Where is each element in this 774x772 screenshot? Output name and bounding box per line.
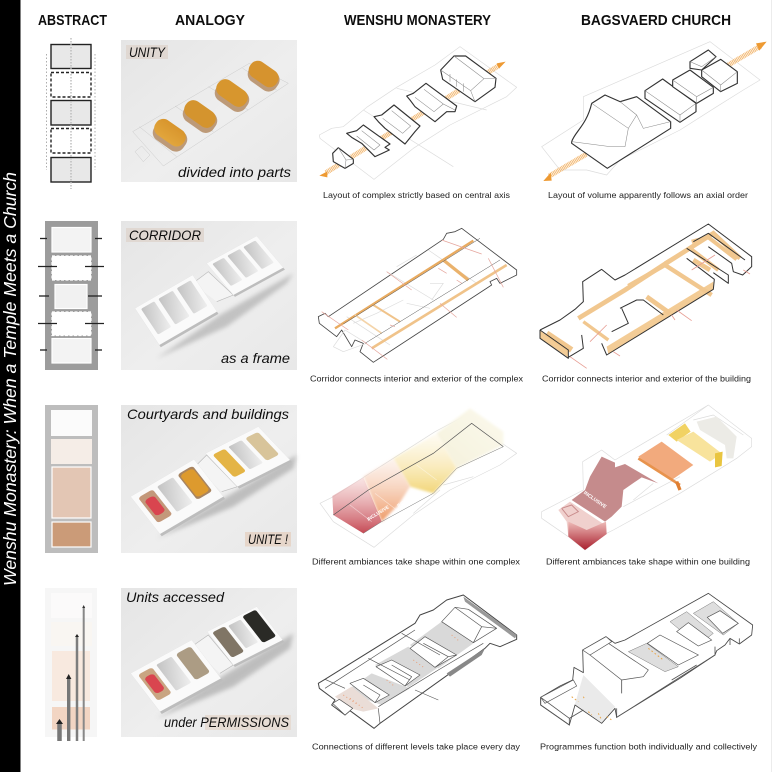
yellow zone	[668, 423, 723, 467]
red zone	[332, 477, 382, 533]
volume 5	[690, 50, 716, 70]
label: corridor: CORRIDOR	[129, 227, 201, 243]
sidebar: vertical title: Wenshu Monastery: When a Temple Meets a Church	[0, 172, 20, 586]
ghost roofs	[333, 250, 477, 352]
zone labels	[366, 491, 420, 522]
abstract diagram: permissions	[45, 588, 97, 741]
photo: courtyards	[121, 405, 297, 553]
heading: analogy: ANALOGY	[175, 12, 245, 29]
outer walls	[540, 224, 752, 358]
right edge line	[771, 0, 772, 772]
caption: Corridor connects interior and exterior of the building	[542, 374, 751, 384]
photo: permissions	[121, 588, 297, 737]
caption: Connections of different levels take place every day	[312, 742, 521, 752]
bagsvaerd diagram: ambiances	[542, 405, 752, 550]
axis line and roofs	[333, 423, 503, 533]
label: as a frame: as a frame	[221, 350, 290, 366]
caption: Layout of complex strictly based on central axis	[323, 190, 510, 200]
zone labels: INCLUSIVE	[366, 504, 390, 522]
plan outline under loaves	[133, 63, 288, 166]
forecourt	[575, 675, 615, 723]
bagsvaerd diagram: programmes	[541, 593, 753, 725]
roofs	[541, 611, 738, 703]
label: courtyards and buildings: Courtyards and buildings	[127, 406, 289, 422]
main volume	[572, 95, 671, 168]
front walls	[541, 638, 739, 725]
label: unite: UNITE !	[248, 531, 288, 547]
label: under permissions: under PERMISSIONS	[164, 714, 290, 730]
abstract diagram: courtyards and buildings	[45, 405, 98, 553]
photo: corridor	[121, 221, 297, 370]
outline and walls	[541, 593, 753, 725]
red entrance box	[558, 502, 607, 550]
heading: wenshu monastery: WENSHU MONASTERY	[344, 12, 491, 29]
wenshu diagram: central axis	[319, 47, 517, 179]
hall 1	[347, 125, 390, 157]
caption: Corridor connects interior and exterior of the complex	[310, 374, 524, 384]
abstract diagram: unity	[46, 38, 95, 189]
volume 2	[645, 79, 696, 122]
zone label: INCLUSIVE	[582, 490, 608, 511]
visitors	[343, 635, 460, 708]
wenshu diagram: ambiances	[320, 408, 517, 547]
grey zone	[697, 417, 737, 458]
volume 4	[702, 59, 737, 92]
label: unity: UNITY	[129, 44, 166, 60]
white trays	[135, 236, 293, 358]
corridor network	[547, 233, 740, 350]
wenshu diagram: corridor	[318, 228, 517, 362]
shaded courtyards	[335, 597, 517, 712]
yellow zone	[393, 433, 457, 493]
hall 2	[374, 105, 420, 144]
pale zone	[437, 408, 503, 468]
filled trays	[131, 427, 297, 538]
zone labels: INCLUSIVE	[396, 491, 420, 508]
sidebar: vertical title	[0, 0, 20, 772]
hall 3	[407, 83, 457, 122]
bagsvaerd diagram: corridor	[540, 224, 752, 368]
red arrows	[570, 255, 750, 368]
gate	[333, 148, 353, 168]
caption: Different ambiances take shape within one building	[546, 556, 750, 566]
orange zone	[638, 442, 693, 490]
church hall shade	[628, 602, 738, 672]
trays with permission fills	[131, 607, 293, 718]
inclusive zone	[572, 457, 658, 522]
photo: unity	[121, 40, 297, 182]
halls	[333, 607, 497, 715]
corridors	[335, 241, 507, 348]
caption: Different ambiances take shape within one complex	[312, 556, 521, 566]
caption: Programmes function both individually and collectively	[540, 742, 758, 752]
abstract diagram: corridor	[38, 221, 104, 370]
orange zone	[363, 458, 410, 522]
bagsvaerd diagram: axial order	[542, 42, 767, 181]
heading: bagsvaerd church: BAGSVAERD CHURCH	[581, 12, 731, 29]
hall 4	[441, 56, 496, 102]
loaves	[149, 57, 283, 155]
people	[572, 648, 663, 720]
caption: Layout of volume apparently follows an axial order	[548, 190, 748, 200]
volume 3	[673, 70, 713, 103]
label: divided into parts: divided into parts	[178, 164, 291, 180]
heading: abstract: ABSTRACT	[38, 12, 107, 29]
corridor roof lines	[325, 630, 483, 723]
label: units accessed: Units accessed	[126, 589, 225, 605]
wenshu diagram: daily connections	[318, 595, 517, 728]
walls and arrows	[322, 238, 503, 359]
